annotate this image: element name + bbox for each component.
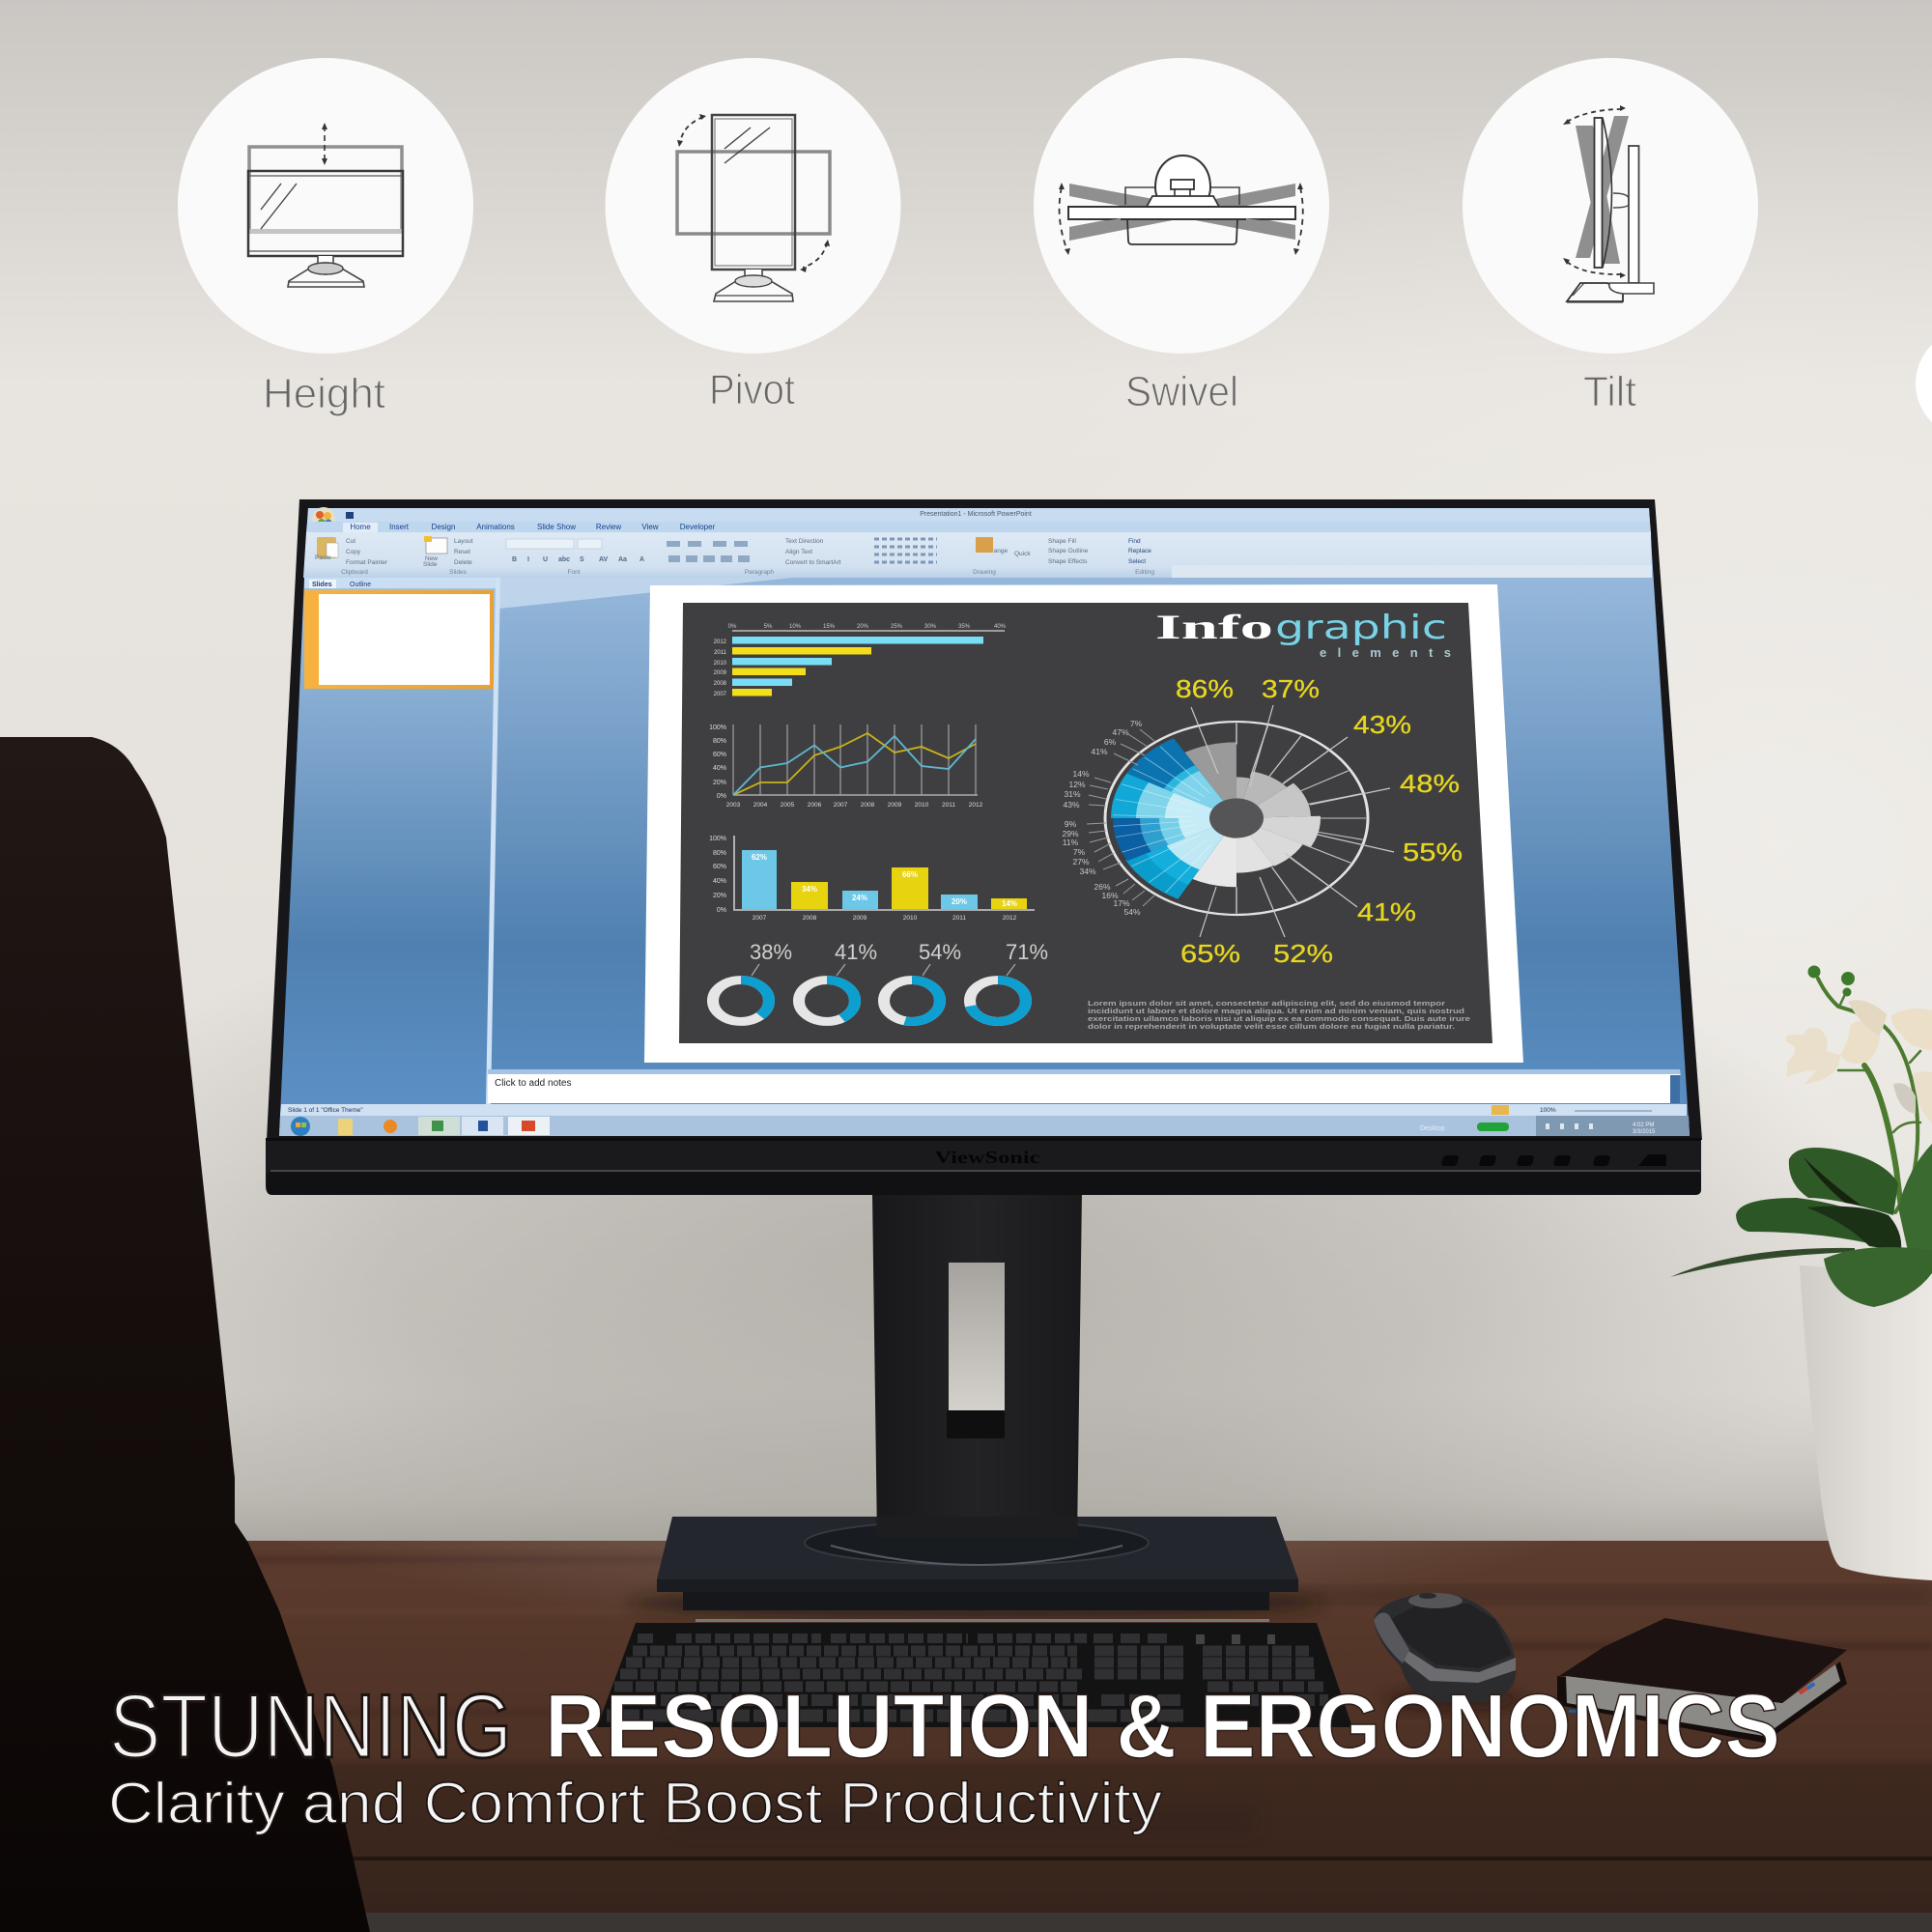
screen: PowerPoint window bbox=[279, 507, 1690, 1136]
column chart: 24% bbox=[852, 894, 867, 902]
notes area: Click to add notes bbox=[495, 1078, 572, 1089]
column chart: 2008 bbox=[803, 915, 817, 922]
notebook pages bbox=[1566, 1664, 1840, 1736]
horizontal bar chart: 40% bbox=[994, 624, 1007, 630]
icon circle row bbox=[178, 58, 1932, 438]
radial chart: 9% bbox=[1065, 819, 1077, 829]
notebook ribbon marks bbox=[1569, 1682, 1815, 1713]
radial chart: 48% bbox=[1400, 769, 1460, 798]
radial chart: 7% bbox=[1073, 847, 1086, 857]
donut: 71% bbox=[970, 940, 1048, 1021]
headline: light part: STUNNING bbox=[109, 1675, 512, 1776]
ribbon: Convert to SmartArt bbox=[785, 559, 841, 566]
ribbon: Text Direction bbox=[785, 538, 824, 545]
subtitle: Clarity and Comfort Boost Productivity bbox=[108, 1771, 1162, 1835]
orchid flowers bbox=[1785, 1000, 1932, 1123]
line chart: 80% bbox=[713, 738, 726, 745]
slides pane bbox=[282, 578, 500, 1104]
donut: 38%: 38% bbox=[750, 940, 792, 964]
line chart: 2011 bbox=[942, 802, 955, 809]
horizontal bar chart: 2010 bbox=[714, 661, 727, 667]
glossy workspace highlight bbox=[499, 578, 792, 609]
ribbon: Shape Fill bbox=[1048, 538, 1076, 545]
notebook bbox=[1557, 1618, 1847, 1743]
monitor bottom bezel bar bbox=[266, 1138, 1701, 1195]
potted orchid bbox=[1670, 966, 1932, 1580]
radial chart: 54% bbox=[1123, 907, 1141, 917]
headline bbox=[109, 1675, 1780, 1776]
ribbon: Find bbox=[1128, 538, 1141, 545]
donut: 54% bbox=[884, 940, 961, 1021]
ribbon: AV bbox=[599, 556, 609, 563]
ribbon: I bbox=[527, 556, 529, 563]
desk bbox=[0, 1541, 1932, 1932]
ribbon: Cut bbox=[346, 538, 355, 545]
ribbon: Slides bbox=[449, 569, 468, 576]
ribbon: abc bbox=[558, 556, 570, 563]
line chart: 0% bbox=[717, 793, 726, 800]
horizontal bar chart: 5% bbox=[764, 624, 773, 630]
partial circle at right edge bbox=[1916, 329, 1932, 438]
circle: pivot bbox=[605, 58, 900, 354]
line chart: 60% bbox=[713, 752, 726, 758]
ribbon: Clipboard bbox=[341, 569, 368, 576]
radial chart: 47% bbox=[1112, 727, 1129, 737]
column chart: 2011 bbox=[952, 915, 966, 922]
infographic panel bbox=[679, 603, 1492, 1043]
column chart: 34% bbox=[802, 885, 817, 894]
donut: 41% bbox=[799, 940, 877, 1021]
slides pane: Slides bbox=[312, 582, 332, 588]
ribbon: Shape Effects bbox=[1048, 558, 1088, 565]
label: Tilt: Tilt bbox=[1583, 368, 1636, 415]
slide page bbox=[644, 584, 1523, 1063]
column chart: 2007 bbox=[753, 915, 767, 922]
line chart: 2004 bbox=[753, 802, 768, 809]
monitor stand neck bbox=[872, 1193, 1082, 1540]
foreground chair silhouette bbox=[0, 737, 370, 1932]
donut: 38% bbox=[713, 940, 792, 1021]
notebook front cover bbox=[1559, 1618, 1847, 1703]
line chart: 2005 bbox=[781, 802, 795, 809]
line chart: 20% bbox=[713, 780, 726, 786]
radial chart: 65% bbox=[1180, 939, 1240, 968]
ribbon: S bbox=[580, 556, 584, 563]
wall shadow behind monitor bbox=[0, 869, 1893, 1642]
radial chart: 34% bbox=[1079, 867, 1096, 876]
infographic heading bbox=[1155, 608, 1451, 660]
ribbon: U bbox=[543, 556, 548, 563]
column chart: 60% bbox=[713, 864, 726, 870]
radial chart: 43% bbox=[1353, 710, 1411, 739]
orchid buds bbox=[1808, 966, 1855, 997]
ribbon tabs: View bbox=[641, 523, 659, 531]
horizontal bar chart: 2011 bbox=[714, 650, 727, 656]
orchid stems bbox=[1818, 979, 1920, 1212]
lorem ipsum text block bbox=[1088, 999, 1470, 1031]
infographic heading: Info bbox=[1155, 608, 1273, 646]
ribbon: Paste bbox=[315, 554, 331, 561]
ribbon: Font bbox=[567, 569, 581, 576]
monitor base bbox=[628, 1517, 1323, 1619]
column chart: 2009 bbox=[853, 915, 867, 922]
radial chart: 11% bbox=[1063, 838, 1079, 847]
radial chart bbox=[1062, 674, 1463, 968]
line chart bbox=[709, 724, 983, 809]
taskbar: 4:02 PM bbox=[1633, 1122, 1654, 1128]
icon: tilt adjustment bbox=[1563, 105, 1654, 302]
monitor bezel bbox=[267, 499, 1702, 1140]
radial chart: 26% bbox=[1094, 882, 1111, 892]
ribbon tabs: Home bbox=[350, 523, 371, 531]
headline: bold part: RESOLUTION & ERGONOMICS bbox=[545, 1675, 1780, 1776]
ribbon: Paragraph bbox=[745, 569, 775, 576]
horizontal bar chart: 2009 bbox=[714, 670, 727, 676]
column chart: 62% bbox=[752, 853, 767, 862]
column chart: 0% bbox=[717, 907, 726, 914]
ribbon: Shape Outline bbox=[1048, 548, 1089, 554]
taskbar bbox=[279, 1116, 1690, 1136]
label: Height: Height bbox=[263, 370, 385, 417]
ribbon: Quick bbox=[1014, 551, 1031, 557]
ribbon tabs: Design bbox=[432, 523, 455, 531]
ribbon tabs: Developer bbox=[680, 523, 716, 531]
radial chart: 43% bbox=[1063, 800, 1080, 810]
column chart: 20% bbox=[952, 897, 967, 906]
horizontal bar chart: 25% bbox=[891, 624, 903, 630]
ribbon: Editing bbox=[1135, 569, 1154, 576]
horizontal bar chart: 10% bbox=[789, 624, 802, 630]
ribbon tabs: Insert bbox=[389, 523, 410, 531]
icon: swivel adjustment bbox=[1059, 156, 1303, 255]
radial chart: 52% bbox=[1273, 939, 1333, 968]
ribbon: Select bbox=[1128, 558, 1146, 565]
radial chart: 14% bbox=[1072, 769, 1090, 779]
line chart: 2006 bbox=[808, 802, 822, 809]
column chart bbox=[709, 836, 1035, 922]
radial chart: 27% bbox=[1072, 857, 1090, 867]
ribbon: New bbox=[425, 555, 438, 562]
column chart: 80% bbox=[713, 850, 726, 857]
lorem ipsum text block: incididunt ut labore et dolore magna aliqua. Ut enim ad minim veniam, quis nostrud bbox=[1088, 1007, 1465, 1015]
ribbon: Format Painter bbox=[346, 559, 388, 566]
ribbon: Copy bbox=[346, 549, 361, 555]
column chart: 20% bbox=[713, 893, 726, 899]
horizontal bar chart: 2008 bbox=[714, 681, 727, 687]
brand logo text: ViewSonic bbox=[935, 1148, 1039, 1167]
ribbon: B bbox=[512, 556, 517, 563]
radial chart: 37% bbox=[1262, 674, 1320, 703]
ribbon: Layout bbox=[454, 538, 473, 545]
column chart: 2010 bbox=[903, 915, 918, 922]
column chart: 66% bbox=[902, 870, 918, 879]
horizontal bar chart: 35% bbox=[958, 624, 971, 630]
ribbon tabs: Slide Show bbox=[537, 523, 576, 531]
ribbon tabs: Animations bbox=[476, 523, 515, 531]
ribbon: Align Text bbox=[785, 549, 812, 555]
icon: height adjustment bbox=[248, 123, 403, 287]
label: Pivot: Pivot bbox=[709, 366, 795, 413]
radial chart: 41% bbox=[1091, 747, 1108, 756]
ribbon: Drawing bbox=[973, 569, 996, 576]
monitor bbox=[266, 499, 1702, 1195]
wall background bbox=[0, 0, 1932, 1546]
ribbon: A bbox=[639, 556, 644, 563]
line chart: 2008 bbox=[861, 802, 875, 809]
title bar bbox=[307, 507, 1650, 530]
lorem ipsum text block: dolor in reprehenderit in voluptate velit esse cillum dolore eu fugiat nulla pariatur. bbox=[1088, 1022, 1455, 1031]
line chart: 2007 bbox=[834, 802, 848, 809]
radial chart: 29% bbox=[1062, 829, 1079, 838]
infographic heading: graphic bbox=[1275, 609, 1447, 647]
horizontal bar chart: 2007 bbox=[714, 692, 727, 697]
circle: height bbox=[178, 58, 473, 354]
column chart: 100% bbox=[709, 836, 726, 842]
mouse bbox=[1374, 1593, 1521, 1710]
horizontal bar chart: 2012 bbox=[714, 639, 727, 645]
monitor buttons bbox=[1441, 1154, 1666, 1166]
column chart: 14% bbox=[1002, 899, 1017, 908]
circle: tilt bbox=[1463, 58, 1758, 354]
line chart: 40% bbox=[713, 765, 726, 772]
stand cable slot bbox=[949, 1263, 1005, 1410]
ribbon: Aa bbox=[618, 556, 627, 563]
column chart: 40% bbox=[713, 878, 726, 885]
horizontal bar chart bbox=[714, 624, 1007, 697]
line chart: 100% bbox=[709, 724, 726, 731]
status bar: 100% bbox=[1540, 1107, 1556, 1114]
radial chart: 12% bbox=[1068, 780, 1086, 789]
notes area bbox=[488, 1069, 1681, 1103]
icon: pivot adjustment bbox=[677, 114, 830, 301]
line chart: 2009 bbox=[888, 802, 902, 809]
slides pane: Outline bbox=[350, 582, 371, 588]
donut: 71%: 71% bbox=[1006, 940, 1048, 964]
donut: 41%: 41% bbox=[835, 940, 877, 964]
orchid leaves bbox=[1670, 1144, 1932, 1307]
ribbon tabs bbox=[306, 522, 1651, 533]
radial chart: 86% bbox=[1176, 674, 1234, 703]
radial chart: 17% bbox=[1113, 898, 1130, 908]
ribbon tabs: Review bbox=[596, 523, 621, 531]
pot bbox=[1800, 1265, 1932, 1580]
notebook back cover bbox=[1557, 1662, 1847, 1743]
ribbon bbox=[303, 532, 1652, 578]
radial chart: 55% bbox=[1403, 838, 1463, 867]
taskbar: Desktop bbox=[1420, 1125, 1445, 1132]
ribbon: Reset bbox=[454, 549, 470, 555]
status bar: Slide 1 of 1 "Office Theme" bbox=[288, 1107, 363, 1114]
horizontal bar chart: 20% bbox=[857, 624, 869, 630]
ribbon: Arrange bbox=[985, 548, 1009, 554]
keyboard bbox=[597, 1619, 1352, 1727]
lorem ipsum text block: Lorem ipsum dolor sit amet, consectetur adipiscing elit, sed do eiusmod tempor bbox=[1088, 999, 1445, 1008]
horizontal bar chart: 30% bbox=[924, 624, 937, 630]
radial chart: 7% bbox=[1130, 719, 1143, 728]
circle: swivel bbox=[1034, 58, 1329, 354]
title bar: Presentation1 - Microsoft PowerPoint bbox=[920, 511, 1032, 518]
taskbar: 3/3/2015 bbox=[1633, 1129, 1656, 1135]
label: Swivel: Swivel bbox=[1125, 368, 1238, 415]
line chart: 2010 bbox=[915, 802, 929, 809]
line chart: 2012 bbox=[969, 802, 983, 809]
horizontal bar chart: 0% bbox=[728, 624, 737, 630]
ribbon: Delete bbox=[454, 559, 472, 566]
status bar bbox=[280, 1104, 1687, 1116]
lorem ipsum text block: exercitation ullamco laboris nisi ut aliquip ex ea commodo consequat. Duis aute irure bbox=[1088, 1014, 1470, 1023]
ribbon: Replace bbox=[1128, 548, 1151, 554]
infographic heading: elements bbox=[1320, 645, 1451, 660]
line chart: 2003 bbox=[726, 802, 741, 809]
radial chart: 31% bbox=[1064, 789, 1081, 799]
radial chart: 41% bbox=[1357, 897, 1416, 926]
stand cable clip bbox=[947, 1410, 1005, 1438]
horizontal bar chart: 15% bbox=[823, 624, 836, 630]
radial chart: 6% bbox=[1104, 737, 1117, 747]
donut: 54%: 54% bbox=[919, 940, 961, 964]
column chart: 2012 bbox=[1003, 915, 1017, 922]
radial chart: 16% bbox=[1101, 891, 1119, 900]
ribbon: Slide bbox=[423, 561, 438, 568]
